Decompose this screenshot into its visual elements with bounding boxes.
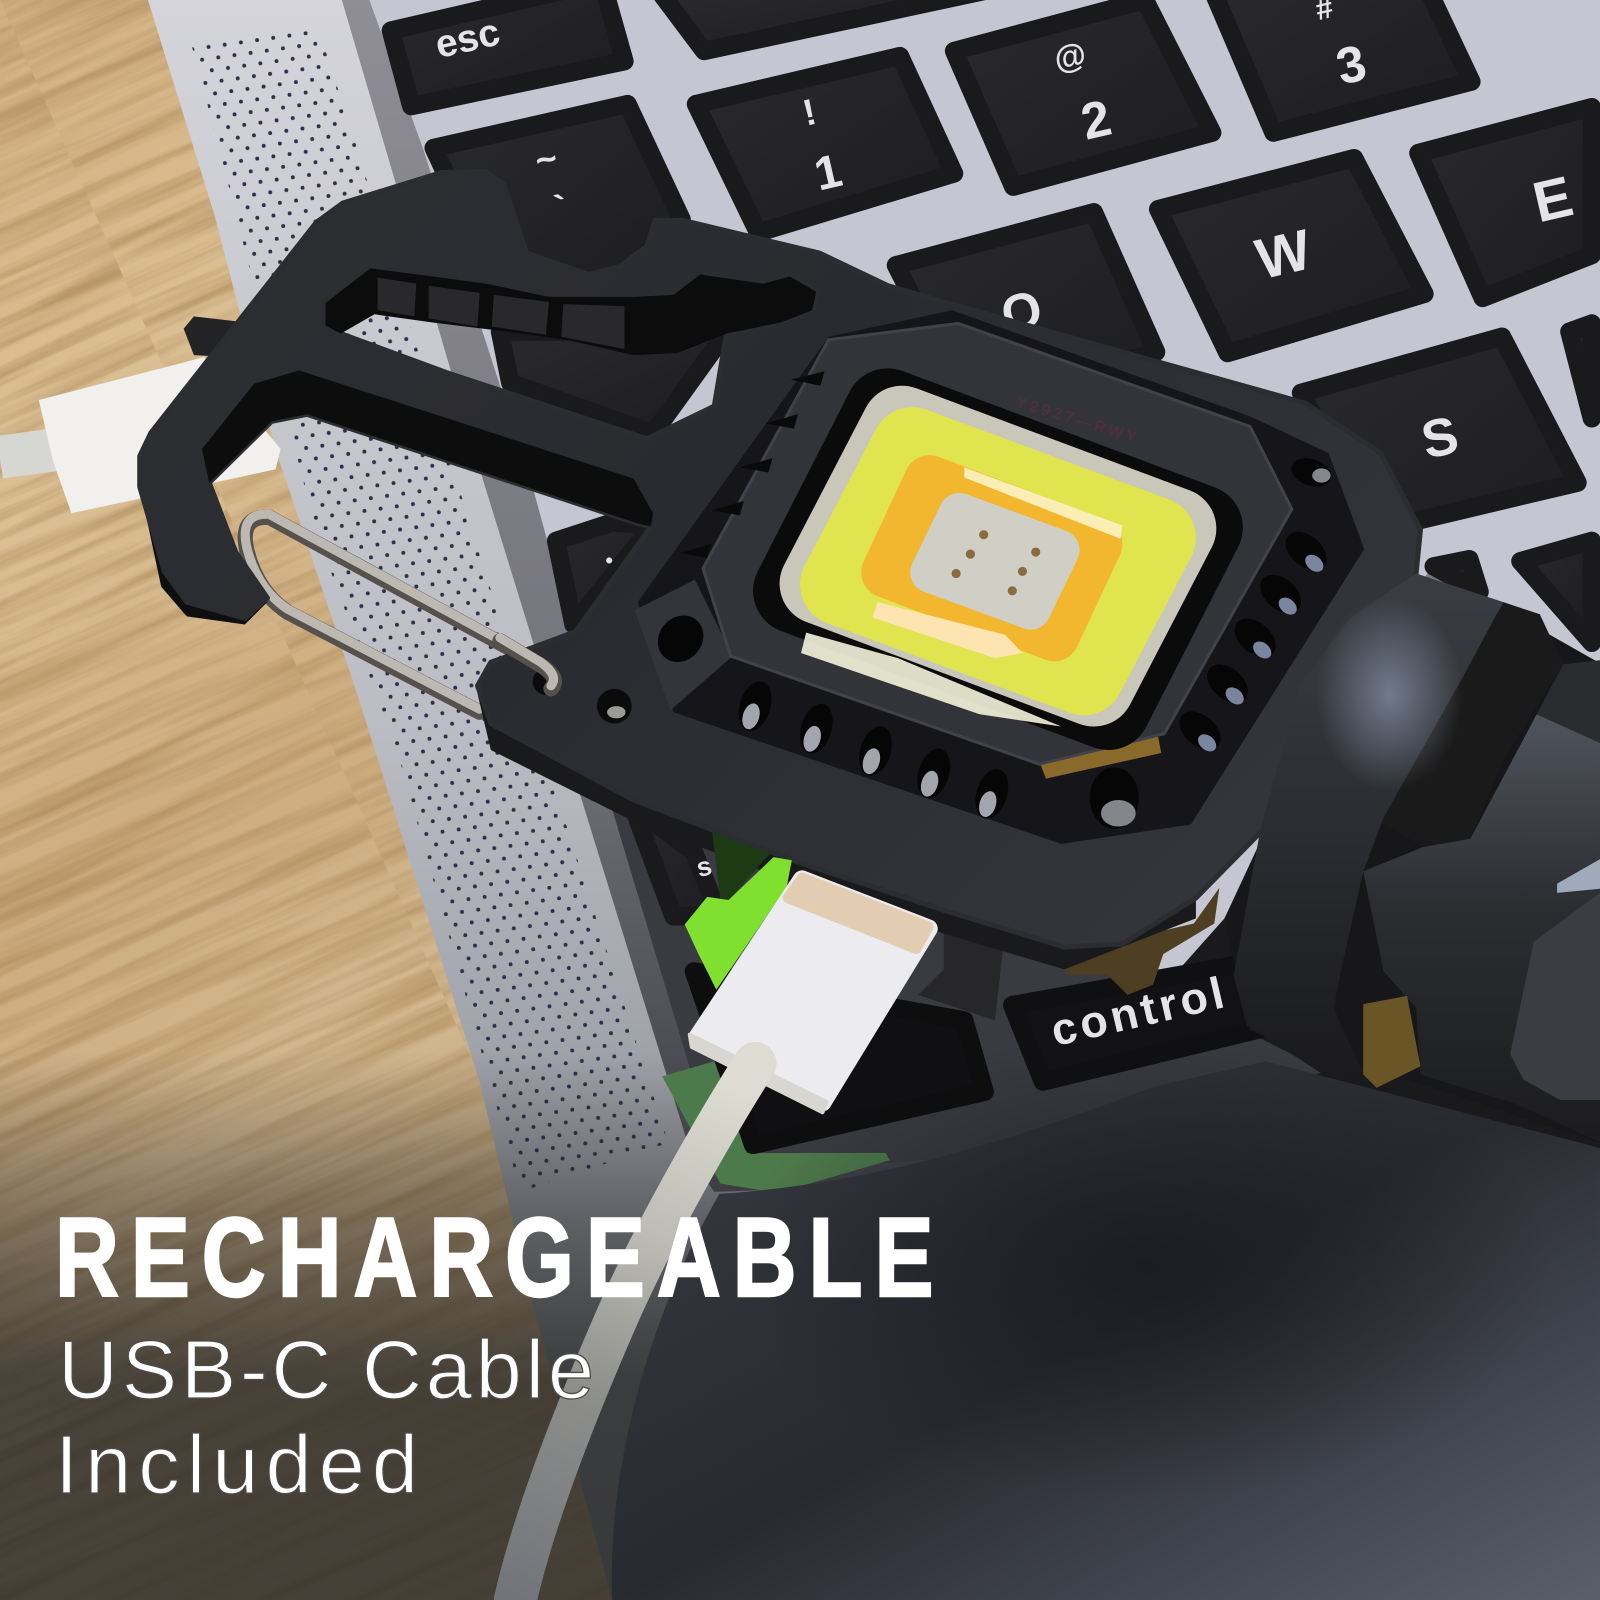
bottom vents [733, 677, 1014, 823]
keyboard well [342, 0, 1600, 1193]
hook underside [140, 487, 267, 624]
main collar [1234, 573, 1503, 1074]
inner frame [703, 323, 1292, 764]
key labels: ~ [531, 137, 561, 182]
key labels: 1 [809, 144, 847, 200]
subheading line 2: Included [55, 1418, 418, 1511]
lens glare [872, 602, 1022, 658]
rear pin [184, 316, 237, 357]
wood table background [0, 0, 633, 1600]
small rivet [597, 689, 632, 723]
key labels: s [694, 850, 715, 883]
gate tip over tool [500, 638, 559, 695]
barrel facet [1510, 893, 1600, 1100]
clear lens [820, 427, 1176, 686]
collar highlight [1316, 597, 1463, 791]
key labels: h [601, 416, 627, 454]
outer collar [1380, 602, 1563, 847]
orange LED [887, 481, 1097, 636]
keychain tool body [140, 171, 1420, 1020]
key labels: esc [431, 11, 504, 67]
gold clip [1363, 996, 1420, 1088]
key labels: E [1527, 164, 1579, 235]
caption [55, 1196, 933, 1511]
lower photo darkening [0, 1051, 776, 1600]
gold highlight [1041, 737, 1161, 779]
key labels: ● [605, 552, 613, 568]
brass base [1061, 888, 1219, 995]
trackpad [612, 1061, 1600, 1600]
lens recess [796, 411, 1200, 707]
key labels: Q [996, 279, 1047, 344]
key labels: W [1250, 218, 1317, 292]
lower bar wall [202, 370, 653, 527]
COB lens [796, 394, 1200, 727]
subheading line 1: USB-C Cable [58, 1323, 594, 1416]
speaker perforation [192, 29, 668, 1192]
flashlight barrel [1224, 573, 1600, 1143]
left ridges [681, 371, 824, 558]
heading: RECHARGEABLE: RECHARGEABLE [55, 1196, 933, 1320]
head housing [635, 310, 1364, 844]
white usb cable left [0, 357, 281, 513]
white USB cable [515, 1063, 755, 1600]
barrel backdrop [1224, 612, 1600, 1143]
yellow LED [841, 448, 1155, 674]
under-tool block [918, 923, 1003, 1020]
trackpad shadow [735, 1031, 1551, 1500]
key labels: 2 [1076, 89, 1116, 151]
tool outline [140, 171, 1420, 947]
key labels: ! [799, 91, 820, 134]
key labels: S [1416, 405, 1464, 471]
right vents [1172, 524, 1334, 757]
key labels [431, 0, 1579, 1056]
key labels: 3 [1331, 34, 1371, 96]
barrel top cap [1537, 660, 1600, 743]
barrel highlight [1557, 859, 1600, 893]
barrel rear [1363, 714, 1600, 1142]
keyboard keys [391, 0, 1592, 1145]
key labels: control [1046, 967, 1229, 1056]
left corner block [635, 580, 733, 710]
key labels: @ [1050, 35, 1090, 78]
centre red LED panel [931, 513, 1059, 609]
LED chips [952, 530, 1040, 595]
carabiner wire gate [245, 514, 541, 712]
USB-C plug [690, 878, 929, 1112]
corner holes [648, 453, 1335, 829]
lens marking: Y2927—RWY [1014, 394, 1138, 446]
green plastic connector [685, 833, 792, 990]
upper slot wall [326, 268, 816, 355]
tool underside wall [478, 694, 1196, 969]
key labels: ` [551, 187, 572, 230]
